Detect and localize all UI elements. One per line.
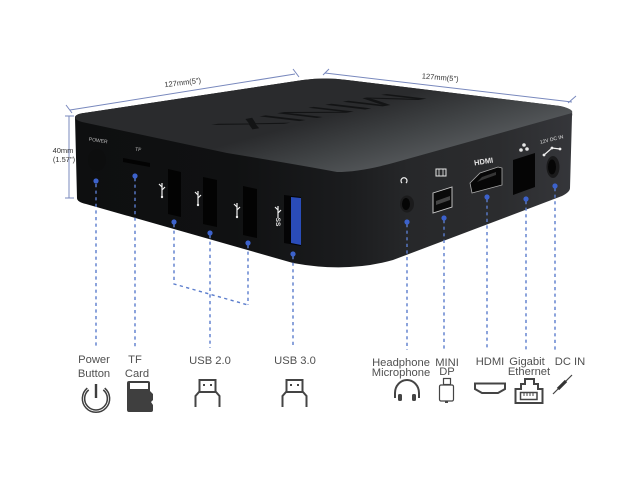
label: headphone microphone: Microphone — [372, 367, 430, 379]
tf card slot — [123, 147, 150, 167]
height dimension — [53, 116, 76, 198]
label: hdmi — [475, 356, 505, 393]
height dimension: (1.57") — [53, 155, 76, 164]
icon: usb plug — [196, 380, 220, 407]
usb 3.0 port: SS — [274, 218, 281, 227]
dc in port — [539, 134, 564, 178]
usb 3.0 port — [274, 195, 301, 246]
width dimension right: 127mm(5") — [421, 71, 459, 84]
icon: usb plug — [282, 380, 306, 407]
device side faces — [75, 78, 572, 267]
label: hdmi: HDMI — [476, 356, 504, 368]
icon: ethernet jack — [516, 379, 542, 403]
label: dc in — [553, 356, 585, 394]
connector dashed lines — [93, 173, 558, 350]
label: mini dp: DP — [439, 366, 455, 378]
label: power button — [78, 354, 110, 411]
icon: mini dp plug — [440, 378, 454, 403]
icon: dc plug — [553, 375, 572, 394]
hdmi port — [470, 156, 502, 193]
height dimension: 40mm — [53, 146, 73, 155]
hdmi port: HDMI — [473, 156, 494, 167]
label: gigabit ethernet — [508, 356, 551, 403]
tf card slot: TF — [135, 147, 142, 153]
icon: sd card — [127, 381, 153, 412]
width dimension right — [323, 69, 576, 103]
usb 2.0 port 2 — [195, 177, 217, 227]
label: gigabit ethernet: Ethernet — [508, 366, 551, 378]
ethernet port — [513, 143, 535, 195]
label: headphone microphone: Headphone — [372, 357, 430, 369]
label: power button: Button — [78, 368, 110, 380]
label: headphone microphone — [372, 357, 430, 401]
device body — [75, 78, 572, 267]
label: mini dp — [435, 357, 459, 403]
label: tf card — [125, 354, 153, 412]
label: mini dp: MINI — [435, 357, 459, 369]
label: gigabit ethernet: Gigabit — [509, 356, 546, 368]
width dimension left: 127mm(5") — [164, 76, 202, 89]
width dimension left — [66, 69, 299, 113]
label: tf card: Card — [125, 368, 149, 380]
device top face — [75, 78, 572, 172]
power port — [88, 137, 108, 171]
mini dp port — [433, 169, 452, 213]
icon: power — [84, 384, 108, 411]
icon: hdmi plug — [475, 384, 505, 393]
audio jack — [400, 178, 414, 212]
icon: headphones — [395, 380, 419, 401]
logo: MINIX — [197, 91, 444, 131]
label: dc in: DC IN — [555, 356, 585, 368]
usb 2.0 port 3 — [234, 186, 257, 238]
label: tf card: TF — [128, 354, 142, 366]
label: usb 2.0: USB 2.0 — [189, 355, 231, 367]
label: usb 2.0 — [189, 355, 231, 407]
dc in port: 12V DC IN — [539, 134, 564, 146]
power port: POWER — [88, 137, 108, 145]
label: power button: Power — [78, 354, 110, 366]
label: usb 3.0 — [274, 355, 316, 407]
usb 2.0 port 1 — [159, 169, 181, 217]
label: usb 3.0: USB 3.0 — [274, 355, 316, 367]
